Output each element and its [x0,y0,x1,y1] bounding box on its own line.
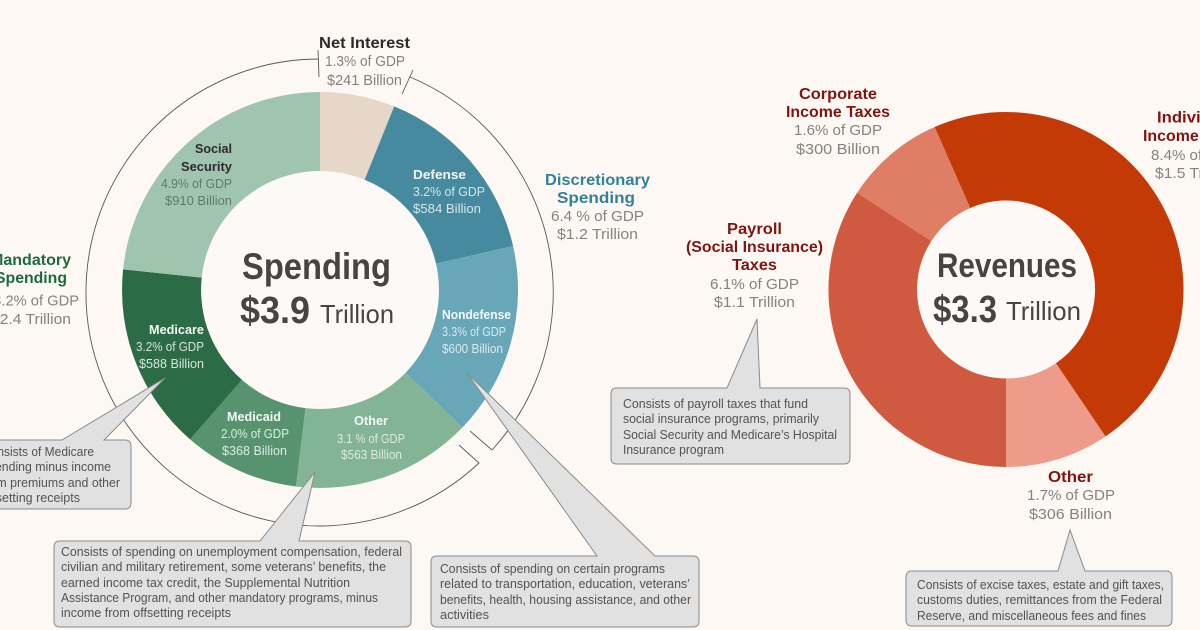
revenues center title: $3.3 [933,289,997,331]
callout: nondefense: Consists of spending on certain programs [440,562,665,576]
label: medicaid: 2.0% of GDP [221,427,289,441]
label: discretionary spending: Spending [557,190,635,207]
label: corporate income taxes: Income Taxes [786,104,890,121]
label: net interest [319,35,410,89]
callout: other revenues: Consists of excise taxes, estate and gift taxes, [917,578,1164,592]
label: other revenues [1027,469,1115,523]
label: corporate income taxes: Corporate [799,86,877,103]
discretionary spending bracket [402,70,553,450]
callout: other mandatory: income from offsetting receipts [61,606,231,620]
callout: other mandatory: Consists of spending on unemployment compensation, federal [61,545,402,559]
label: other spending [337,413,405,462]
label: social security: $910 Billion [165,194,232,208]
callout: other revenues: Reserve, and miscellaneous fees and fines [917,609,1146,623]
label: social security: Security [181,159,233,174]
label: discretionary spending [545,172,650,243]
label: medicaid [221,409,289,458]
label: payroll taxes: 6.1% of GDP [710,277,799,293]
label: defense: $584 Billion [413,202,481,216]
label: discretionary spending: Discretionary [545,172,650,189]
revenues center title: Revenues [937,247,1077,285]
label: medicare [136,322,204,371]
callout: nondefense: activities [440,608,489,622]
spending center title: Trillion [320,299,394,329]
callout: other mandatory: Assistance Program, and other mandatory programs, minus [61,591,378,605]
label: payroll taxes [686,221,823,311]
label: net interest: 1.3% of GDP [325,54,405,70]
label: mandatory spending [0,252,79,328]
callout: other mandatory [54,472,411,627]
label: other revenues: $306 Billion [1029,507,1112,523]
label: individual income taxes [1143,110,1200,182]
label: other revenues: Other [1048,469,1093,486]
callout: payroll [611,319,850,464]
spending center title [240,246,394,332]
label: discretionary spending: $1.2 Trillion [557,227,638,243]
label: social security: Social [195,141,232,156]
label: nondefense: Nondefense [442,307,511,322]
label: nondefense: $600 Billion [442,342,503,356]
label: net interest: Net Interest [319,35,410,52]
callout: other mandatory: civilian and military retirement, some veterans’ benefits, the [61,560,386,574]
mandatory spending bracket [86,50,479,526]
label: medicaid: $368 Billion [222,444,287,458]
label: payroll taxes: $1.1 Trillion [714,295,795,311]
label: defense [413,167,485,216]
callout: other revenues [906,530,1172,626]
label: corporate income taxes: $300 Billion [796,142,880,158]
label: social security: 4.9% of GDP [161,177,232,191]
callout: payroll: Consists of payroll taxes that fund [623,397,808,411]
callout: other mandatory: earned income tax credit, the Supplemental Nutrition [61,576,350,590]
revenues donut chart [828,112,1184,467]
label: discretionary spending: 6.4 % of GDP [551,209,644,225]
label: defense: 3.2% of GDP [413,185,485,199]
callout: nondefense [431,373,699,627]
label: social security [161,141,233,208]
callout: payroll: Insurance program [623,443,724,457]
callout: nondefense: related to transportation, education, veterans’ [440,577,690,591]
callout: other revenues: customs duties, remittances from the Federal [917,593,1162,607]
label: other spending: $563 Billion [341,448,402,462]
spending donut chart [122,92,518,488]
label: medicare: Medicare [149,322,204,337]
callout: medicare [0,378,165,509]
label: payroll taxes: Payroll [727,221,782,238]
revenues center title [933,247,1081,331]
revenues center title: Trillion [1006,296,1081,326]
label: corporate income taxes [786,86,890,158]
spending center title: Spending [242,246,391,287]
callout: payroll: Social Security and Medicare’s Hospital [623,428,837,442]
label: medicare: $588 Billion [139,357,204,371]
label: other spending: 3.1 % of GDP [337,432,405,446]
label: corporate income taxes: 1.6% of GDP [794,123,882,139]
label: defense: Defense [413,167,466,182]
label: net interest: $241 Billion [327,73,402,89]
callout: nondefense: benefits, health, housing assistance, and other [440,593,691,607]
label: medicare: 3.2% of GDP [136,340,204,354]
label: other revenues: 1.7% of GDP [1027,488,1115,504]
label: nondefense [442,307,511,356]
callout: payroll: social insurance programs, primarily [623,412,820,426]
label: nondefense: 3.3% of GDP [442,325,506,339]
label: payroll taxes: (Social Insurance) [686,239,823,256]
label: medicaid: Medicaid [227,409,281,424]
label: payroll taxes: Taxes [732,257,777,274]
label: other spending: Other [354,413,388,428]
spending center title: $3.9 [240,290,310,332]
